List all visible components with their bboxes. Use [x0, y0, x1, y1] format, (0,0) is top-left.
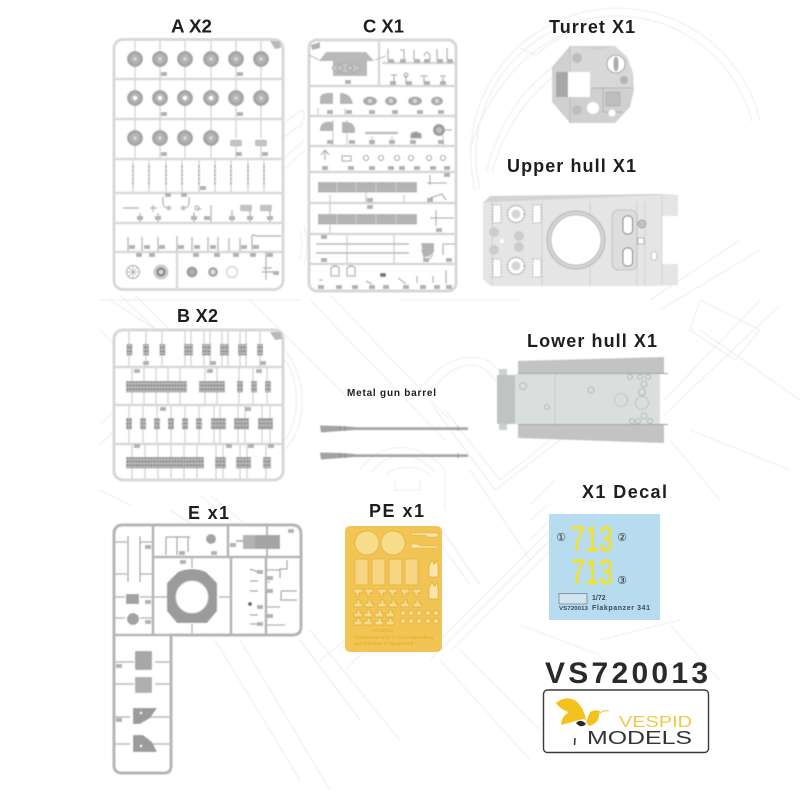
- decal index marks: ①: [556, 532, 566, 544]
- heading: Turret X1: Turret X1: [549, 17, 635, 37]
- Vespid Models logo: MODELS: [587, 728, 692, 748]
- heading: C X1: C X1: [363, 16, 404, 36]
- product code: VS720013: [545, 657, 708, 690]
- corner tab: [270, 41, 281, 49]
- heading: B X2: B X2: [177, 306, 218, 326]
- part tabs: [116, 529, 294, 722]
- grey panels: [318, 182, 417, 224]
- PE brackets: [429, 560, 438, 599]
- decal caption: 1/72: [592, 595, 606, 602]
- turret ring: [547, 211, 605, 269]
- small parts: [123, 197, 281, 280]
- upper hull part: [483, 194, 678, 286]
- decal caption: Flakpanzer 341: [592, 605, 650, 612]
- heading: E x1: E x1: [188, 503, 229, 523]
- decal numbers: 713: [571, 520, 613, 559]
- hull plates: [126, 525, 280, 752]
- sprue E: [114, 525, 301, 773]
- decal sheet: [549, 514, 660, 620]
- turret part: [552, 46, 634, 123]
- part tabs: [129, 72, 279, 275]
- heading: Lower hull X1: Lower hull X1: [527, 331, 657, 351]
- armour plates: [320, 93, 355, 133]
- engine deck grilles: [493, 205, 541, 277]
- wheels row 2: [127, 90, 269, 106]
- Vespid Models logo: [544, 690, 708, 752]
- small wheels: [363, 96, 445, 136]
- sprue C: [309, 40, 456, 291]
- heading: A X2: A X2: [171, 16, 212, 36]
- decal numbers: [571, 520, 613, 592]
- wasp icon: [556, 698, 609, 745]
- heading: X1 Decal: X1 Decal: [582, 482, 667, 502]
- decal index marks: [556, 532, 627, 587]
- decal caption: [559, 595, 650, 612]
- part tabs: [318, 59, 453, 289]
- decal index marks: ③: [617, 575, 627, 587]
- PE small parts: [354, 589, 439, 625]
- track links: [126, 344, 273, 468]
- decal mini logo: [559, 594, 587, 604]
- gun barrel 1: [320, 426, 468, 432]
- turret ring part: [167, 569, 217, 623]
- decal index marks: ②: [617, 532, 627, 544]
- PE grilles: [355, 559, 418, 585]
- small parts: [128, 536, 297, 624]
- logo wordmark: VESPID: [619, 714, 692, 731]
- heading: Upper hull X1: Upper hull X1: [507, 156, 636, 176]
- PE discs: [355, 531, 405, 555]
- heading: Metal gun barrel: Metal gun barrel: [347, 388, 436, 399]
- decal numbers: 713: [571, 553, 613, 592]
- hatches: [612, 210, 657, 270]
- PE etched text: [355, 628, 434, 646]
- wheels row 3: [127, 130, 266, 146]
- part tabs: [134, 361, 274, 448]
- turret front plate part: [309, 52, 386, 84]
- gun barrel 2: [320, 452, 468, 460]
- wheels row 1: [127, 51, 269, 67]
- PE etched text: Flakpanzer 341 3.7cm Flakzwilling: [355, 635, 434, 640]
- sprue B: [114, 330, 283, 480]
- small parts: [319, 48, 455, 284]
- sprue A: [114, 39, 283, 290]
- decal caption: VS720013: [559, 606, 588, 612]
- engine deck fans: [489, 206, 524, 274]
- PE strips: [411, 533, 438, 548]
- bottom wheels: [126, 264, 238, 280]
- photo-etch fret: [345, 526, 442, 652]
- lower hull part: [497, 357, 668, 443]
- PE etched text: auf Panther II fahrgestell: [355, 641, 413, 646]
- heading: PE x1: PE x1: [369, 501, 424, 521]
- PE etched text: VS720013: [372, 628, 394, 633]
